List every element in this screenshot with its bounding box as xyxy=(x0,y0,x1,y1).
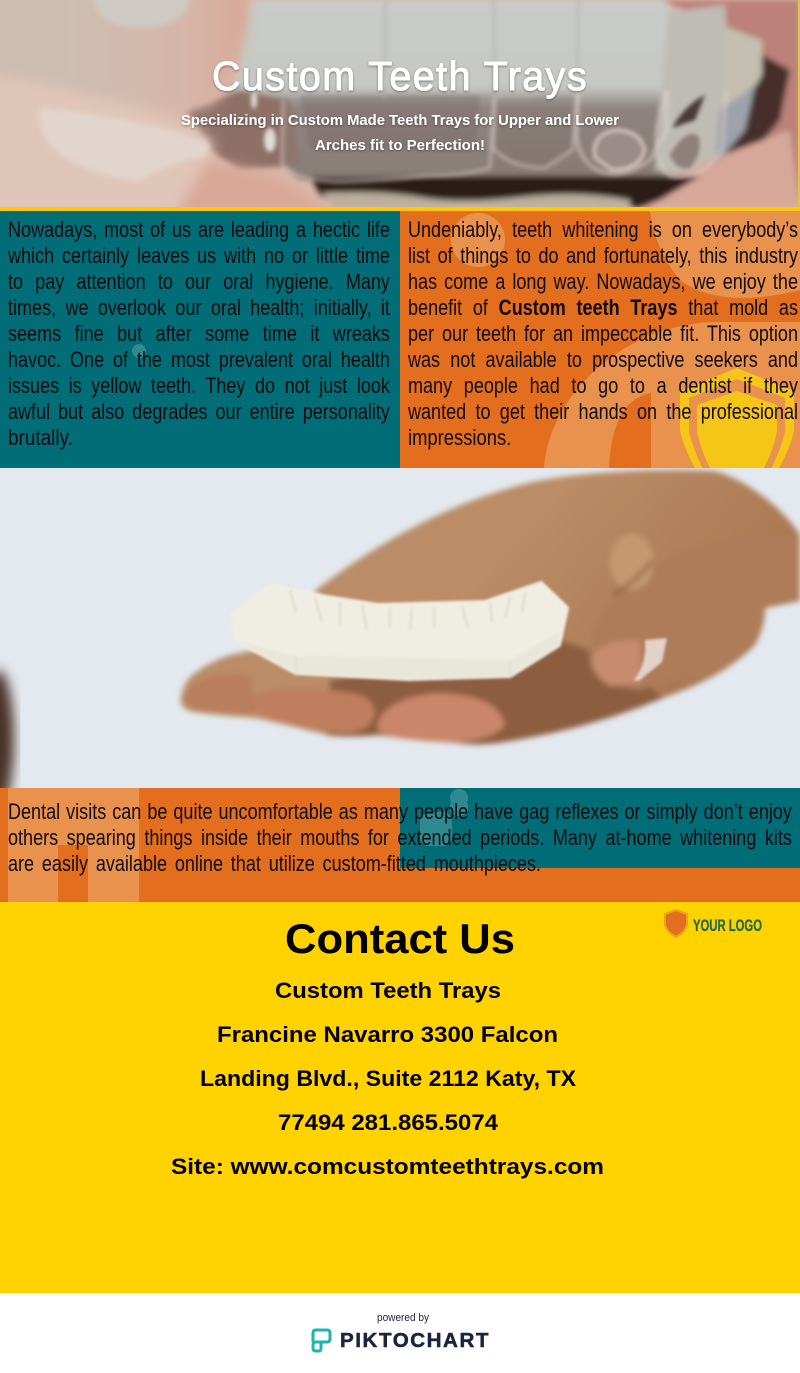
hero banner xyxy=(0,0,800,215)
right text block: wanted to get their hands on the professional xyxy=(408,399,798,424)
subtitle: Specializing in Custom Made Teeth Trays for Upper and Lower xyxy=(181,112,619,129)
right text block: many people had to go to a dentist if they xyxy=(408,373,798,398)
subtitle: Arches fit to Perfection! xyxy=(315,137,485,154)
decorative shape xyxy=(8,788,139,902)
left text block: to pay attention to our oral hygiene. Many xyxy=(8,269,390,294)
bottom text block: Dental visits can be quite uncomfortable as many people have gag reflexes or simply don’t enjoy xyxy=(8,799,792,824)
panel: contact us xyxy=(0,902,800,1293)
contact heading: Contact Us xyxy=(285,915,515,962)
logo xyxy=(665,910,762,937)
right text block: impressions. xyxy=(408,425,511,450)
nail xyxy=(633,638,667,681)
left text block: awful but also degrades our entire personality xyxy=(8,399,390,424)
powered by label: powered by xyxy=(377,1312,429,1324)
right text block: list of things to do and fortunately, this industry xyxy=(408,243,798,268)
left text block: havoc. One of the most prevalent oral health xyxy=(8,347,390,372)
right text block: has come a long way. Nowadays, we enjoy the xyxy=(408,269,798,294)
right text block: benefit of Custom teeth Trays that mold as xyxy=(408,295,798,320)
bottom text block: are easily available online that utilize custom-fitted mouthpieces. xyxy=(8,851,541,876)
photo: hand holding teeth mold xyxy=(0,468,800,810)
left text block: Nowadays, most of us are leading a hectic life xyxy=(8,217,390,242)
contact details: Custom Teeth Trays xyxy=(275,978,501,1003)
contact details: Site: www.comcustomteethtrays.com xyxy=(171,1154,604,1179)
tray lobes xyxy=(248,90,728,186)
subtitle xyxy=(181,112,619,154)
hero photo: teeth tray xyxy=(0,0,800,215)
panel: dental visits text xyxy=(0,788,800,902)
Piktochart wordmark: PIKTOCHART xyxy=(340,1330,490,1352)
icon: shield watermark xyxy=(680,368,794,475)
contact details: Landing Blvd., Suite 2112 Katy, TX xyxy=(200,1066,576,1091)
contact details: Francine Navarro 3300 Falcon xyxy=(217,1022,558,1047)
yellow divider line xyxy=(0,207,800,211)
bottom text block xyxy=(8,799,792,879)
footer: powered by Piktochart xyxy=(0,1293,800,1373)
left text block: issues is yellow teeth. They do not just look xyxy=(8,373,390,398)
left text block: times, we overlook our oral health; initially, it xyxy=(8,295,390,320)
logo: YOUR LOGO xyxy=(693,916,762,935)
icon: logo shield xyxy=(665,910,687,937)
left text block: seems fine but after some time it wreaks xyxy=(8,321,390,346)
right text block: Undeniably, teeth whitening is on everybody’s xyxy=(408,217,798,242)
contact details xyxy=(171,978,604,1179)
right text block: was not available to prospective seekers and xyxy=(408,347,798,372)
right text block: per our teeth for an impeccable fit. This option xyxy=(408,321,798,346)
right text block xyxy=(408,217,798,457)
contact details: 77494 281.865.5074 xyxy=(278,1110,499,1135)
panel: hectic life text xyxy=(0,211,400,468)
left text block: brutally. xyxy=(8,425,73,450)
left text block: which certainly leaves us with no or little time xyxy=(8,243,390,268)
left text block xyxy=(8,217,390,457)
fingers xyxy=(0,0,330,215)
hand xyxy=(181,470,800,744)
icon: Piktochart mark xyxy=(313,1330,330,1351)
title: Custom Teeth Trays xyxy=(212,53,588,99)
panel: custom trays text xyxy=(400,211,800,475)
bottom text block: others spearing things inside their mouths for extended periods. Many at-home whitening kits xyxy=(8,825,792,850)
mold xyxy=(232,583,567,679)
